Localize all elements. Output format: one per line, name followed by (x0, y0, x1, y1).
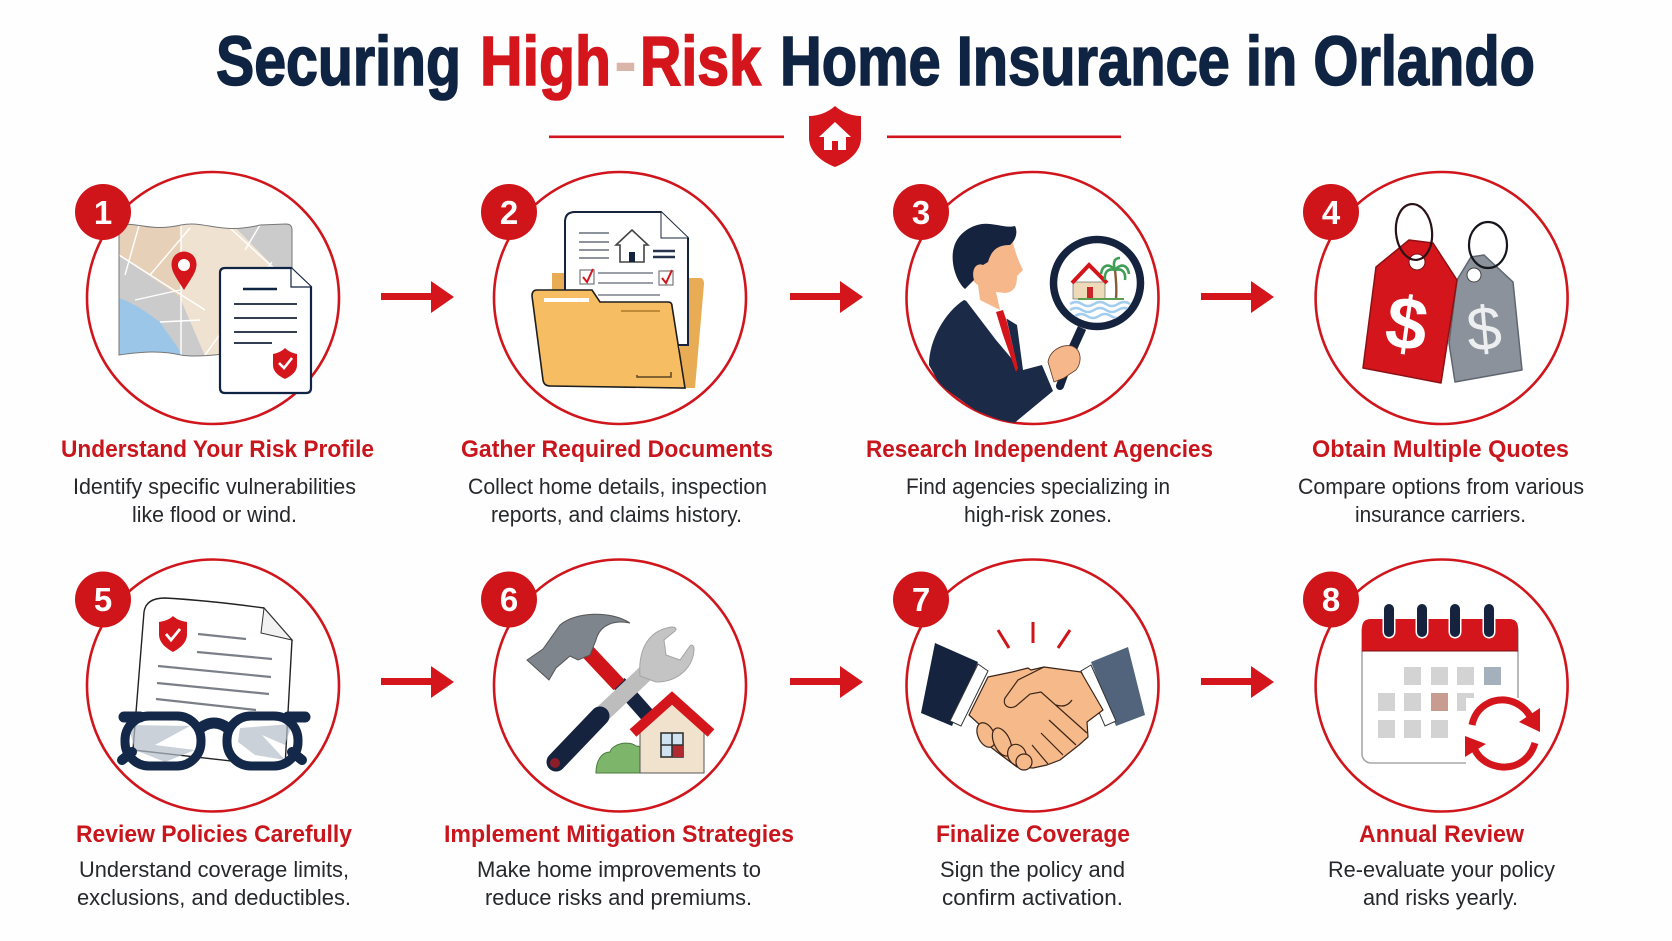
title: Securing (216, 22, 461, 100)
arrow 3 to 4 (1201, 281, 1274, 313)
icon: handshake (921, 622, 1145, 770)
sparks (998, 622, 1070, 648)
number badge 1 (75, 184, 131, 240)
icon: map pin (171, 251, 196, 290)
description (73, 474, 356, 527)
description (1328, 857, 1555, 910)
refresh arrows (1465, 700, 1540, 767)
number badge 5: 5 (94, 581, 112, 618)
glasses (122, 716, 305, 766)
description: Make home improvements to (477, 857, 761, 882)
number badge 4 (1303, 184, 1359, 240)
heading: Finalize Coverage (936, 821, 1130, 848)
title: - (614, 22, 637, 100)
panel: step 6 implement mitigation strategies (444, 560, 794, 910)
arrow 2 to 3 (790, 281, 863, 313)
hands (969, 667, 1103, 768)
number badge 8 (1303, 572, 1359, 628)
sleeves (921, 643, 978, 726)
heading: Implement Mitigation Strategies (444, 821, 794, 848)
heading: Review Policies Carefully (76, 821, 353, 848)
arrow 5 to 6 (381, 666, 454, 698)
description: exclusions, and deductibles. (77, 885, 351, 910)
description (1298, 474, 1584, 527)
icon: agent with magnifier (929, 224, 1140, 425)
description: Collect home details, inspection (468, 474, 767, 499)
icon: map with pin and document (119, 220, 311, 393)
description: Understand coverage limits, (79, 857, 349, 882)
icon: folder with documents (532, 212, 704, 388)
title divider with shield icon (549, 106, 1121, 167)
red tag: $ (1381, 280, 1433, 367)
description: reports, and claims history. (491, 502, 742, 527)
number badge 6 (481, 572, 537, 628)
icon: policy document with glasses (122, 598, 305, 767)
title: Home Insurance in Orlando (780, 22, 1535, 100)
house with bush (596, 698, 711, 773)
calendar day cells (1378, 667, 1501, 738)
description: Re-evaluate your policy (1328, 857, 1555, 882)
arrow 6 to 7 (790, 666, 863, 698)
heading: Obtain Multiple Quotes (1312, 436, 1569, 463)
agent figure (929, 224, 1053, 425)
panel: step 7 finalize coverage (893, 560, 1158, 910)
heading: Annual Review (1359, 821, 1524, 848)
description (906, 474, 1170, 527)
magnifier (1054, 240, 1140, 326)
wrench (550, 627, 694, 768)
hammer (527, 614, 650, 718)
number badge 2: 2 (500, 194, 518, 231)
icon: price tags (1363, 202, 1522, 383)
panel: step 2 gather required documents (461, 172, 773, 527)
red tag (1363, 202, 1457, 383)
arrow 7 to 8 (1201, 666, 1274, 698)
description: reduce risks and premiums. (485, 885, 752, 910)
description: insurance carriers. (1355, 502, 1526, 527)
number badge 7: 7 (912, 581, 930, 618)
title: High (480, 22, 611, 100)
number badge 3: 3 (912, 194, 930, 231)
heading: Understand Your Risk Profile (61, 436, 374, 463)
heading: Research Independent Agencies (866, 436, 1213, 463)
description (77, 857, 351, 910)
gray tag (1449, 222, 1522, 382)
description (477, 857, 761, 910)
title: Risk (640, 22, 761, 100)
panel: step 1 understand your risk profile (61, 172, 374, 527)
number badge 5 (75, 572, 131, 628)
description: confirm activation. (942, 885, 1123, 910)
description: Identify specific vulnerabilities (73, 474, 356, 499)
description (940, 857, 1125, 910)
number badge 7 (893, 572, 949, 628)
icon: calendar with refresh arrows (1362, 609, 1540, 768)
number badge 3 (893, 184, 949, 240)
panel: step 4 obtain multiple quotes (1298, 172, 1584, 527)
number badge 6: 6 (500, 581, 518, 618)
number badge 2 (481, 184, 537, 240)
gray tag: $ (1464, 294, 1504, 365)
description: and risks yearly. (1363, 885, 1518, 910)
description: high-risk zones. (964, 502, 1112, 527)
title (216, 22, 1535, 100)
description (468, 474, 767, 527)
heading: Gather Required Documents (461, 436, 773, 463)
number badge 1: 1 (94, 194, 112, 231)
description: like flood or wind. (132, 502, 297, 527)
panel: step 3 research independent agencies (866, 172, 1213, 527)
icon: document with shield (220, 268, 311, 393)
description: Find agencies specializing in (906, 474, 1170, 499)
panel: step 8 annual review (1303, 560, 1568, 910)
description: Sign the policy and (940, 857, 1125, 882)
arrow 1 to 2 (381, 281, 454, 313)
number badge 4: 4 (1322, 194, 1341, 231)
number badge 8: 8 (1322, 581, 1340, 618)
icon: hammer, wrench and house (527, 614, 711, 773)
description: Compare options from various (1298, 474, 1584, 499)
panel: step 5 review policies carefully (75, 560, 353, 910)
